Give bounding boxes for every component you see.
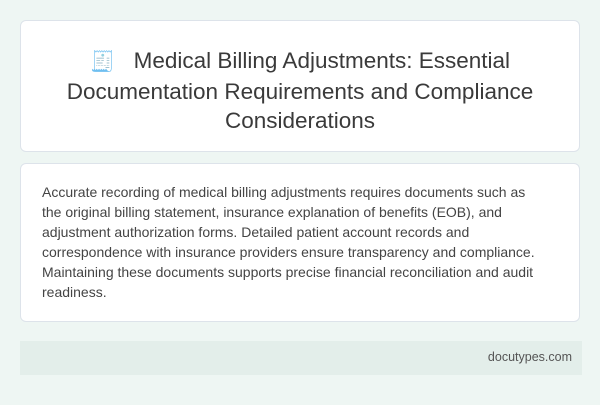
title (67, 48, 533, 133)
title: Considerations (225, 108, 375, 133)
title: Documentation Requirements and Compliance (67, 79, 533, 104)
description text (42, 184, 535, 300)
description text: adjustment authorization forms. Detailed patient account records and (42, 224, 469, 240)
description text: the original billing statement, insurance explanation of benefits (EOB), and (42, 204, 502, 220)
header card (20, 20, 580, 152)
description text: correspondence with insurance providers ensure transparency and compliance. (42, 244, 535, 260)
description text: readiness. (42, 284, 107, 300)
description text: Maintaining these documents supports precise financial reconciliation and audit (42, 264, 533, 280)
footer: docutypes.com (488, 350, 572, 364)
footer (20, 341, 582, 375)
title: 🧾 Medical Billing Adjustments: Essential (90, 48, 510, 73)
description text: Accurate recording of medical billing adjustments requires documents such as (42, 184, 525, 200)
body card (20, 163, 580, 322)
